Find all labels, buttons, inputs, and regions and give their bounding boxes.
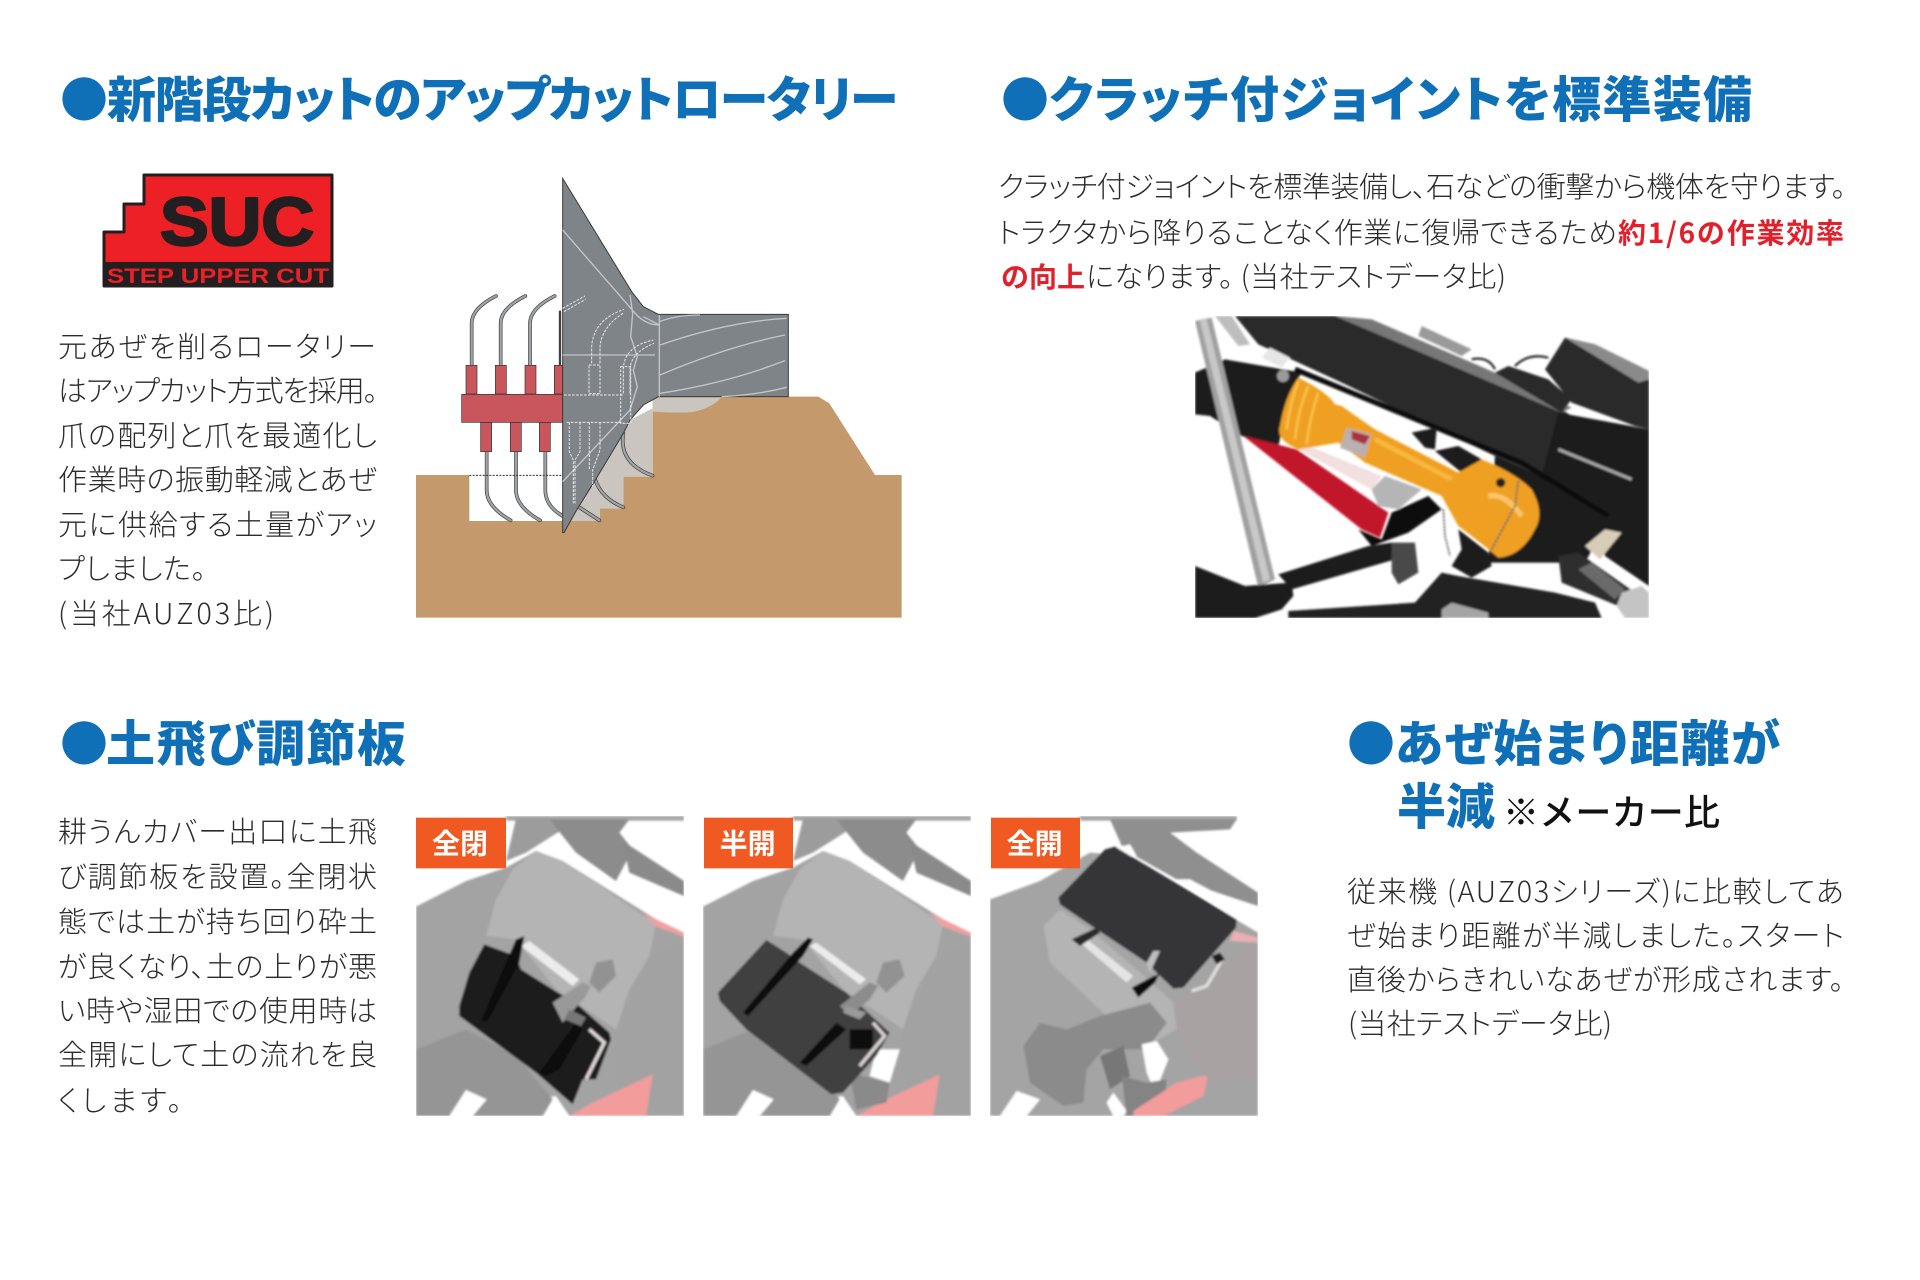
logo: SUC step upper cut [104,175,332,288]
photo: plate half open [703,816,971,1116]
red frame bar [1243,436,1388,538]
red tine holders [462,365,563,452]
badge [991,818,1080,868]
steel pole [1195,318,1275,588]
text block: upcut description: 作業時の振動軽減とあぜ [58,457,377,499]
soil cross-section [416,397,902,618]
control box [1545,338,1649,429]
loosened soil [567,397,722,521]
text block: clutch description [998,164,1846,296]
text block: clutch description: トラクタから降りることなく作業に復帰できるため [998,210,1617,252]
heading: ridge start distance halved: あぜ始まり距離が [1395,705,1780,776]
badge [704,818,793,868]
text block: soil plate description [58,809,377,1120]
photo: plate half open: 半開 [720,822,776,862]
text block: ridge start description [1347,869,1844,1043]
text block: ridge start description: (当社テストデータ比) [1348,1001,1612,1043]
text block: soil plate description: 耕うんカバー出口に土飛 [58,809,377,851]
spring [1558,553,1635,606]
cover dashed hidden lines [563,296,654,503]
wires [1472,356,1548,369]
rod [810,943,866,984]
text block: ridge start description: ぜ始まり距離が半減しました。スタート [1347,913,1844,955]
heading: ridge start distance halved: ● [1347,705,1395,775]
body [990,853,1258,1116]
heading: soil guard plate: 土飛び調節板 [106,705,406,776]
heading: upcut rotary: 新階段カットのアップカットロータリー [107,61,898,132]
photo: plate fully closed: 全閉 [432,822,488,862]
text block: upcut description: プしました。 [58,546,206,588]
photo: clutch joint [1195,316,1649,618]
heading: clutch joint: ● [1001,61,1049,131]
bottom right frame [1288,573,1602,618]
black bracket [1132,973,1160,998]
text block: clutch description: になります。 (当社テストデータ比) [1086,254,1506,296]
heading: ridge start distance halved [1347,705,1780,839]
black open flap [1058,847,1237,989]
grey rotary cover [563,178,788,533]
black drive housing [1195,359,1302,446]
text block: soil plate description: い時や湿田での使用時は [58,988,377,1030]
black lower bracket [1358,496,1442,546]
chain on yoke [1492,481,1518,549]
dashed soil level line [469,474,563,477]
logo: SUC step upper cut: STEP UPPER CUT [107,265,329,288]
heading: ridge start distance halved: 半減 [1397,768,1495,839]
badge [416,818,506,868]
photo: plate fully closed [416,816,684,1116]
bottom left frame [1195,566,1293,618]
text block: clutch description: 約1/6の作業効率 [1618,212,1844,252]
text block: clutch description: の向上 [1001,256,1085,296]
text block: upcut description: (当社AUZ03比) [58,591,274,633]
orange shaft sleeve [1279,378,1539,558]
text block: soil plate description: が良くなり、土の上りが悪 [58,944,377,986]
rod [1078,938,1133,983]
diagram: rotary cutting stepped soil [416,178,902,618]
text block: soil plate description: 全開にして土の流れを良 [58,1032,377,1074]
heading: soil guard plate: ● [60,705,108,775]
text block: soil plate description: 態では土が持ち回り砕土 [58,899,377,941]
logo: SUC step upper cut: SUC [160,184,314,260]
text block: ridge start description: 直後からきれいなあぜが形成されます。 [1347,957,1844,999]
text block: upcut description: 元あぜを削るロータリー [58,324,376,366]
dark between chain and shaft [1412,428,1437,449]
black flap [459,944,611,1104]
handle [586,1029,604,1079]
cover light lines [563,230,787,482]
hole [1496,478,1505,487]
rod [521,941,579,986]
main black beam [1235,316,1572,476]
text block: upcut description [58,324,378,633]
right black frame [1542,413,1649,586]
chain [1295,369,1608,516]
cross bar [1278,543,1395,589]
text block: upcut description: 爪の配列と爪を最適化し [58,413,377,455]
text block: ridge start description: 従来機 (AUZ03シリーズ)に比較してあ [1347,869,1844,911]
photo: plate fully open: 全開 [1007,822,1063,862]
text block: clutch description: クラッチ付ジョイントを標準装備し、石などの衝撃から機体を守ります。 [998,164,1846,206]
connector [1262,348,1290,368]
black flap [718,940,890,1094]
heading: ridge start distance halved: ※メーカー比 [1503,784,1720,836]
right latch [1192,958,1223,991]
photo: plate fully open [990,816,1258,1116]
heading: clutch joint: クラッチ付ジョイントを標準装備 [1049,61,1752,132]
text block: upcut description: はアップカット方式を採用。 [58,368,378,410]
handle [860,1023,885,1066]
text block: soil plate description: び調節板を設置。全閉状 [58,854,377,896]
text block: soil plate description: くします。 [58,1078,182,1120]
heading: upcut rotary: ● [60,61,108,131]
tines [472,296,653,520]
warning label [1340,428,1372,458]
bolt [1372,476,1422,509]
text block: upcut description: 元に供給する土量がアッ [58,502,377,544]
